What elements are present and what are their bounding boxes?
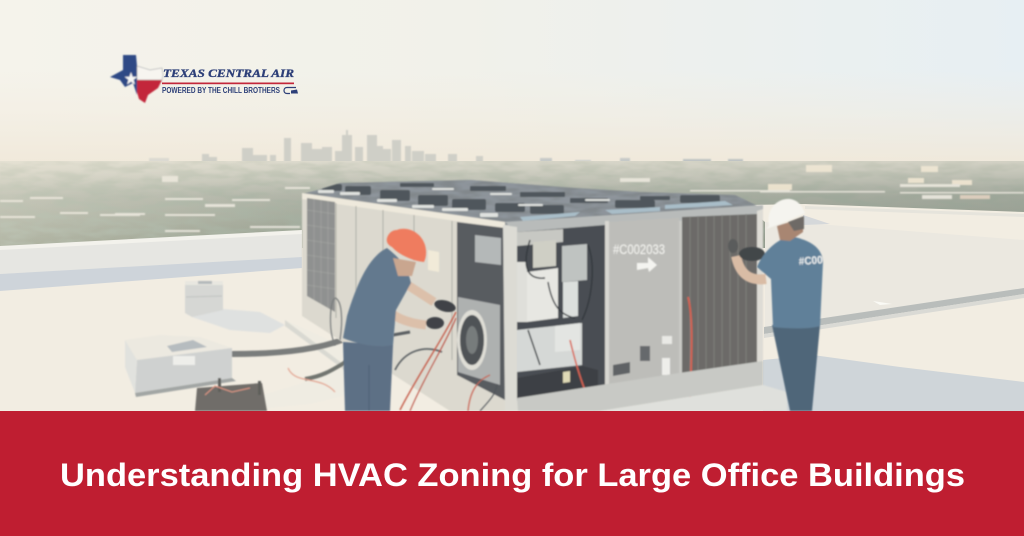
open cabinet interior (517, 225, 605, 411)
city ground (0, 161, 1024, 248)
right face frame (506, 220, 683, 374)
roof surface (0, 215, 1024, 411)
red rule (162, 82, 294, 84)
fans on top (306, 180, 756, 224)
red hose (688, 297, 692, 411)
brand name: TEXAS CENTRAL AIR (163, 66, 294, 80)
small condenser fan (457, 297, 500, 385)
platform under unit (284, 320, 344, 370)
white hard hat (766, 199, 805, 229)
intake grille (307, 198, 335, 312)
logo: Texas Central Air (110, 55, 298, 103)
right roof shadow and curb (763, 288, 1024, 411)
gloves (434, 299, 456, 313)
sky (0, 0, 1024, 170)
arms (406, 284, 434, 302)
head (777, 218, 803, 241)
open cabinet left section (457, 222, 505, 400)
jeans (343, 342, 393, 411)
icon: arrow (637, 257, 657, 272)
icon: Texas map flag (110, 55, 163, 103)
shirt text: #C00 (798, 254, 823, 268)
jeans (772, 325, 820, 411)
base rail (517, 361, 763, 411)
left parapet (0, 230, 302, 291)
electrical box with conduit (125, 335, 349, 411)
orange hard hat (387, 229, 426, 262)
right parapet (754, 204, 1024, 225)
label sticker (428, 250, 439, 272)
left side face (302, 194, 505, 411)
icon: chill brothers mark (284, 88, 298, 94)
background photo: rooftop scene (0, 0, 1024, 411)
worker with orange hard hat (343, 229, 457, 411)
access panel (605, 218, 679, 388)
title banner (0, 411, 1024, 536)
city skyline (149, 130, 744, 161)
coil grille (682, 214, 757, 374)
hoses near worker (330, 298, 497, 411)
shirt (343, 248, 411, 346)
corner post (503, 225, 518, 411)
corner post right (757, 209, 763, 391)
gloves (739, 247, 765, 261)
panel seams (336, 203, 452, 360)
title: Understanding HVAC Zoning for Large Office Buildings (60, 457, 965, 493)
worker with white hard hat (728, 199, 823, 411)
face (393, 258, 416, 276)
HVAC unit (300, 178, 787, 411)
shirt (757, 236, 823, 328)
unit ID text: #C002033 (613, 242, 665, 257)
tagline: POWERED BY THE CHILL BROTHERS (162, 86, 281, 95)
arm (736, 256, 766, 279)
rooftop vent box (185, 281, 285, 333)
